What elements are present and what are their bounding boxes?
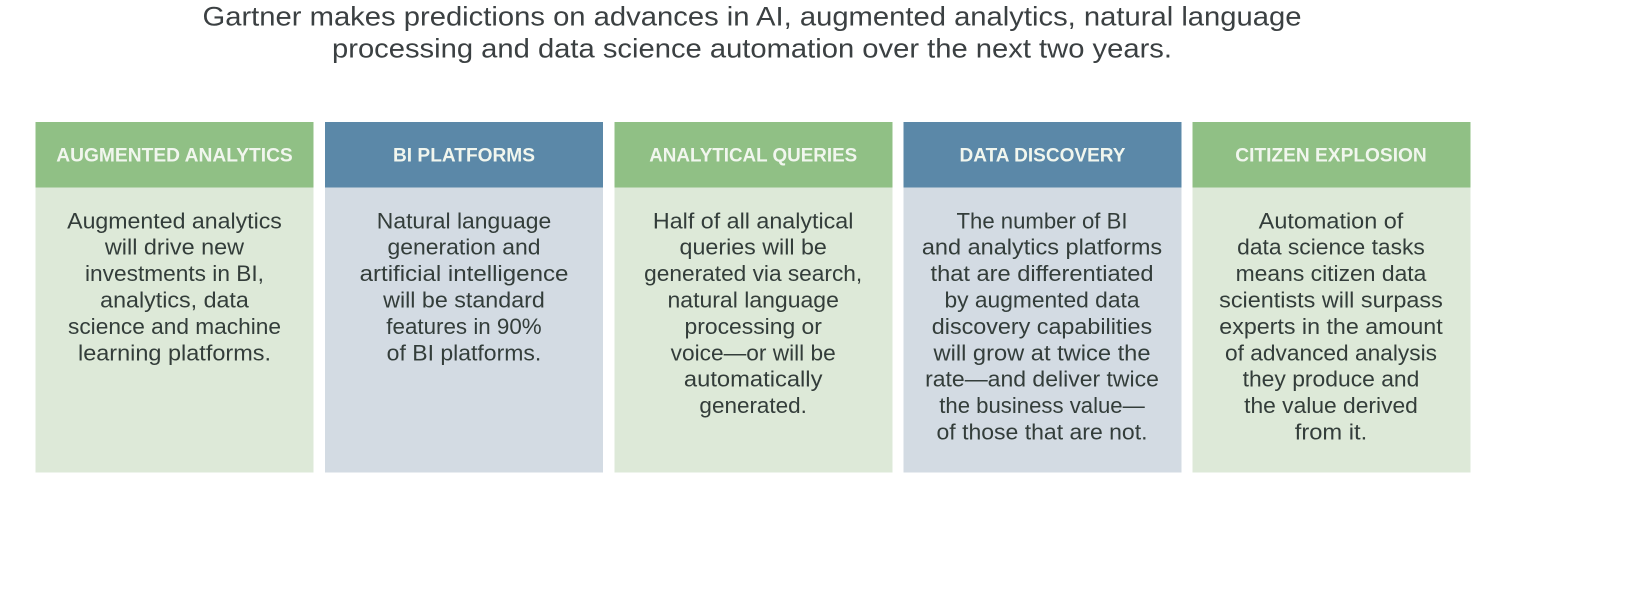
- body text: analytical queries: Half of all analytical: [653, 208, 853, 233]
- body text: analytical queries: generated.: [699, 393, 807, 418]
- header: data discovery: DATA DISCOVERY: [960, 146, 1126, 167]
- body text: BI platforms: features in 90%: [386, 314, 542, 339]
- body text: analytical queries: generated via search,: [644, 261, 862, 286]
- body text: analytical queries: processing or: [684, 314, 822, 339]
- body text: BI platforms: will be standard: [382, 288, 545, 312]
- panel: augmented analytics: [36, 122, 314, 472]
- body text: BI platforms: Natural language: [377, 208, 551, 233]
- body text: BI platforms: of BI platforms.: [387, 340, 541, 365]
- header: BI platforms: BI PLATFORMS: [393, 146, 535, 167]
- body text: augmented analytics: learning platforms.: [78, 340, 271, 365]
- panel: analytical queries: [614, 122, 892, 472]
- body text: citizen explosion: data science tasks: [1237, 235, 1425, 260]
- header: citizen explosion: CITIZEN EXPLOSION: [1235, 146, 1427, 167]
- body text: citizen explosion: experts in the amount: [1219, 314, 1443, 339]
- body text: data discovery: rate—and deliver twice: [925, 367, 1159, 392]
- body text: BI platforms: artificial intelligence: [360, 261, 568, 286]
- header: citizen explosion: [1192, 122, 1470, 188]
- body text: augmented analytics: analytics, data: [100, 288, 250, 312]
- header: analytical queries: ANALYTICAL QUERIES: [649, 146, 857, 167]
- panel: citizen explosion: [1192, 122, 1470, 472]
- body text: data discovery: The number of BI: [956, 208, 1128, 233]
- title: [202, 2, 1302, 64]
- header: BI platforms: [325, 122, 603, 188]
- header: augmented analytics: [36, 122, 314, 188]
- header: analytical queries: [614, 122, 892, 188]
- body text: citizen explosion: Automation of: [1259, 208, 1404, 233]
- body text: data discovery: will grow at twice the: [932, 340, 1150, 365]
- body text: citizen explosion: the value derived: [1244, 393, 1418, 418]
- body text: augmented analytics: [67, 208, 282, 365]
- body text: citizen explosion: they produce and: [1243, 367, 1419, 392]
- body text: citizen explosion: scientists will surpass: [1219, 288, 1443, 312]
- body text: augmented analytics: investments in BI,: [85, 261, 264, 286]
- header: data discovery: [904, 122, 1182, 188]
- body text: BI platforms: [360, 208, 568, 365]
- body text: citizen explosion: [1219, 208, 1443, 444]
- body text: citizen explosion: means citizen data: [1236, 261, 1427, 286]
- body text: citizen explosion: of advanced analysis: [1225, 340, 1437, 365]
- body text: data discovery: the business value—: [939, 393, 1145, 418]
- body text: analytical queries: [644, 208, 862, 418]
- body text: augmented analytics: will drive new: [104, 235, 244, 260]
- body text: analytical queries: queries will be: [680, 235, 827, 260]
- title: processing and data science automation over the next two years.: [332, 34, 1172, 64]
- panel: BI platforms: [325, 122, 603, 472]
- header: augmented analytics: AUGMENTED ANALYTICS: [56, 146, 293, 167]
- body text: augmented analytics: Augmented analytics: [67, 208, 282, 233]
- body text: citizen explosion: from it.: [1295, 420, 1367, 444]
- body text: data discovery: discovery capabilities: [932, 314, 1152, 339]
- body text: BI platforms: generation and: [388, 235, 540, 260]
- panel: data discovery: [904, 122, 1182, 472]
- title: Gartner makes predictions on advances in AI, augmented analytics, natural language: [202, 2, 1302, 32]
- body text: analytical queries: automatically: [684, 367, 822, 392]
- body text: augmented analytics: science and machine: [68, 314, 281, 339]
- body text: data discovery: [922, 208, 1162, 444]
- body text: analytical queries: voice—or will be: [671, 340, 836, 365]
- body text: analytical queries: natural language: [668, 288, 839, 312]
- body text: data discovery: by augmented data: [944, 288, 1140, 312]
- body text: data discovery: and analytics platforms: [922, 235, 1162, 260]
- body text: data discovery: of those that are not.: [936, 420, 1148, 444]
- body text: data discovery: that are differentiated: [930, 261, 1154, 286]
